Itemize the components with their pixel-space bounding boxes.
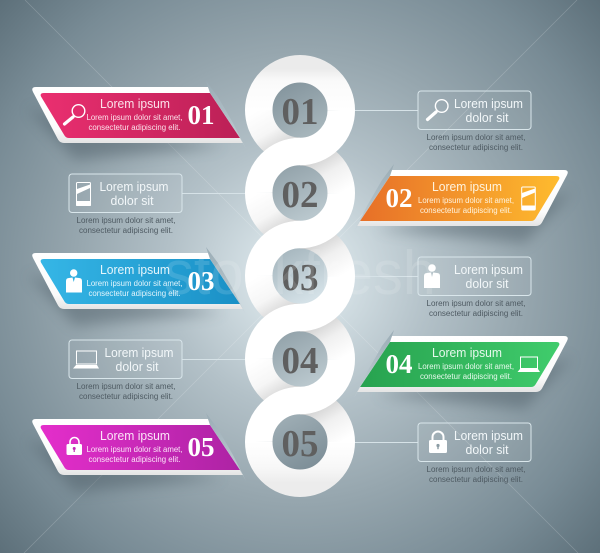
outline box 05 (right): lock: Lorem ipsum [454, 429, 523, 443]
outline box 01 (right): magnifier [355, 91, 531, 152]
outline box 04 (left): laptop [69, 340, 245, 401]
panel 02: phone, orange banner: Lorem ipsum [432, 180, 502, 194]
outline box 02 (left): phone: consectetur adipiscing elit. [79, 226, 173, 235]
icon: lock [66, 438, 82, 455]
outline box 05 (right): lock: dolor sit [466, 443, 509, 457]
outline box 05 (right): lock [355, 423, 531, 484]
icon: phone [522, 187, 536, 210]
panel 02: phone, orange banner [354, 164, 572, 243]
disc numbers: 04 [282, 340, 318, 382]
icon: laptop [73, 351, 99, 368]
panel 04: laptop, green banner: Lorem ipsum [432, 346, 502, 360]
panel 03: person, blue banner: Lorem ipsum dolor sit amet, [86, 279, 182, 288]
panel 05: lock, purple banner: Lorem ipsum [100, 429, 170, 443]
icon: person [66, 269, 82, 292]
panel 05: lock, purple banner: Lorem ipsum dolor sit amet, [86, 445, 182, 454]
panel 01: magnifier, red banner: Lorem ipsum [100, 97, 170, 111]
woven white paper chain [259, 69, 341, 483]
panel 04: laptop, green banner [354, 330, 572, 409]
outline box 03 (right): person: consectetur adipiscing elit. [429, 309, 523, 318]
panel 01: magnifier, red banner: 01 [188, 100, 214, 130]
outline box 01 (right): magnifier: Lorem ipsum dolor sit amet, [426, 133, 526, 142]
disc numbers: 05 [282, 423, 318, 465]
panel 03: person, blue banner: consectetur adipiscing elit. [88, 289, 180, 298]
disc numbers: 03 [282, 257, 318, 299]
ring base arcs [259, 69, 341, 483]
icon: phone [76, 182, 91, 206]
outline box 01 (right): magnifier: dolor sit [466, 111, 509, 125]
panel 03: person, blue banner [28, 247, 246, 326]
outline box 02 (left): phone: Lorem ipsum dolor sit amet, [76, 216, 176, 225]
outline box 04 (left): laptop: Lorem ipsum [104, 346, 174, 360]
outline box 01 (right): magnifier: consectetur adipiscing elit. [429, 143, 523, 152]
panel 04: laptop, green banner: Lorem ipsum dolor sit amet, [418, 362, 514, 371]
panel 03: person, blue banner: Lorem ipsum [100, 263, 170, 277]
number discs [271, 81, 329, 471]
outline box 03 (right): person [355, 257, 531, 318]
disc numbers: 01 [282, 91, 318, 133]
outline box 03 (right): person: dolor sit [466, 277, 509, 291]
watermark: stockfresh [164, 239, 436, 308]
panel 05: lock, purple banner: 05 [188, 432, 214, 462]
panel 02: phone, orange banner: Lorem ipsum dolor sit amet, [418, 196, 514, 205]
outline box 02 (left): phone: dolor sit [110, 194, 154, 208]
icon: person [424, 264, 440, 288]
panel 02: phone, orange banner: 02 [386, 183, 412, 213]
panel 04: laptop, green banner: 04 [386, 349, 412, 379]
icon: laptop [518, 357, 540, 372]
panel 02: phone, orange banner: consectetur adipiscing elit. [420, 206, 512, 215]
panel 03: person, blue banner: 03 [188, 266, 214, 296]
outline box 03 (right): person: Lorem ipsum [454, 263, 523, 277]
icon: lock [429, 432, 447, 453]
outline box 04 (left): laptop: dolor sit [116, 360, 159, 374]
disc numbers: 02 [282, 174, 318, 216]
outline box 05 (right): lock: Lorem ipsum dolor sit amet, [426, 465, 526, 474]
disc numbers [282, 91, 318, 465]
outline box 01 (right): magnifier: Lorem ipsum [454, 97, 523, 111]
over-crossing S bands [259, 110, 341, 442]
panel 05: lock, purple banner [28, 413, 246, 492]
panel 01: magnifier, red banner: consectetur adipiscing elit. [88, 123, 180, 132]
panel 01: magnifier, red banner [28, 81, 246, 160]
outline box 04 (left): laptop: consectetur adipiscing elit. [79, 392, 173, 401]
panel 01: magnifier, red banner: Lorem ipsum dolor sit amet, [86, 113, 182, 122]
outline box 02 (left): phone [69, 174, 245, 235]
panel 05: lock, purple banner: consectetur adipiscing elit. [88, 455, 180, 464]
outline box 05 (right): lock: consectetur adipiscing elit. [429, 475, 523, 484]
outline box 04 (left): laptop: Lorem ipsum dolor sit amet, [76, 382, 176, 391]
outline box 03 (right): person: Lorem ipsum dolor sit amet, [426, 299, 526, 308]
panel 04: laptop, green banner: consectetur adipiscing elit. [420, 372, 512, 381]
outline box 02 (left): phone: Lorem ipsum [100, 180, 168, 194]
icon: magnifier [64, 105, 85, 124]
icon: magnifier [428, 100, 448, 120]
